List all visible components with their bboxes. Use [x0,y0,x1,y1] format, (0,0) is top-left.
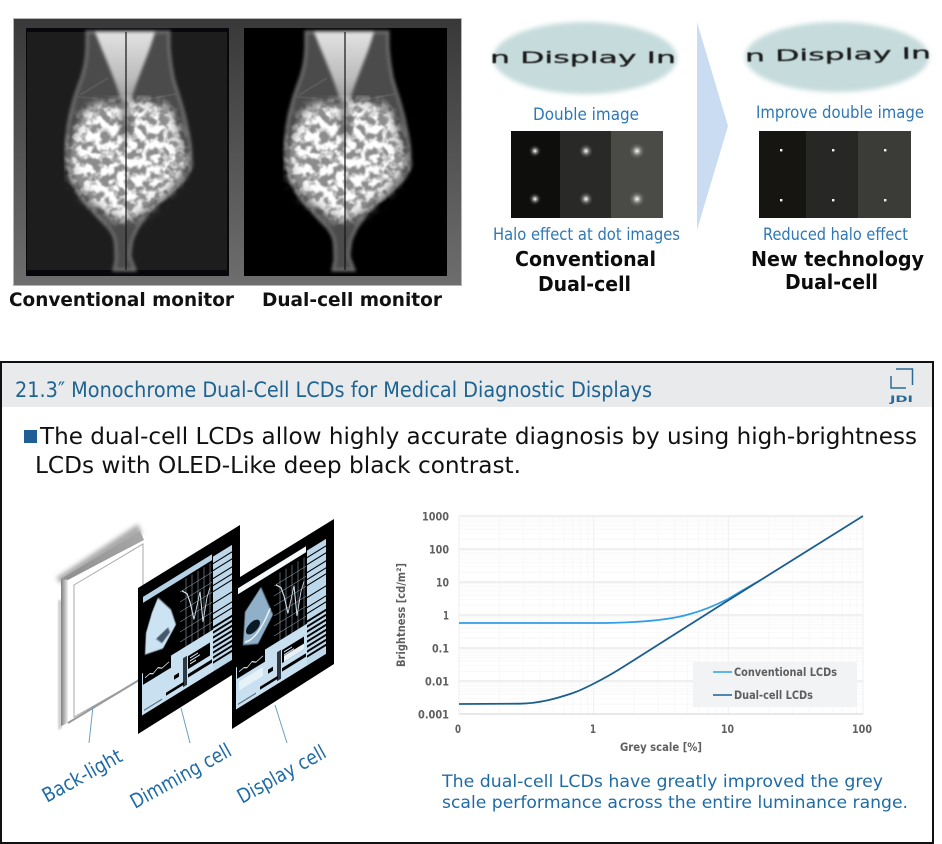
y axis tick labels: 1000 [422,510,449,524]
bullet square [24,430,37,443]
slide title: 21.3″ Monochrome Dual-Cell LCDs for Medical Diagnostic Displays [15,378,652,402]
reduced halo dot test image [759,131,911,218]
diagram: exploded dual-cell structure [38,519,334,813]
back-light panel [56,524,144,730]
line: conventional LCDs [459,580,760,623]
label: back-light: Back-light [38,744,127,807]
y axis title: Brightness [cd/m²] [394,563,408,667]
y axis tick labels [418,510,449,722]
x axis title: Grey scale [%] [620,740,702,754]
panel: new technology dual-cell [745,22,931,294]
icon: JDI logo [888,369,913,405]
caption: reduced halo effect: Reduced halo effect [763,225,908,244]
display cell [232,519,334,729]
caption: halo effect: Halo effect at dot images [493,225,680,244]
caption: grey scale performance: scale performance across the entire luminance range. [442,793,908,813]
label: dual-cell monitor: Dual-cell monitor [262,289,443,311]
legend: Conventional LCDs [734,665,837,679]
caption: grey scale performance [441,772,908,813]
caption: improve double image: Improve double image [756,103,924,123]
arrow: conventional to new technology [697,22,728,230]
icon: JDI logo: JDI [888,395,913,405]
label: display cell: Display cell [233,740,330,808]
legend: Dual-cell LCDs [734,688,813,702]
text block: key statement: The dual-cell LCDs allow highly accurate diagnosis by using high-brightness [39,424,917,450]
heading: conventional dual-cell: Dual-cell [538,272,631,296]
y axis tick labels: 10 [436,576,449,590]
line chart: brightness vs grey scale [394,510,872,754]
heading: conventional dual-cell [515,247,656,296]
dual-cell monitor image [244,28,447,276]
y axis tick labels: 0.001 [418,708,449,722]
label: conventional monitor: Conventional monitor [9,289,235,311]
improved lens photo: n Display In [745,43,931,66]
panel: conventional dual-cell [490,22,680,296]
panel: slide frame [1,362,933,843]
dimming cell [138,525,240,734]
x axis tick labels: 0 [455,722,461,736]
heading: new technology dual-cell [751,247,924,294]
y axis tick labels: 0.01 [425,674,449,688]
double image lens photo [490,22,677,94]
halo dot test image [511,131,663,218]
line: dual-cell LCDs [459,516,863,704]
text block: key statement: LCDs with OLED-Like deep black contrast. [35,453,521,479]
text block: key statement [24,424,917,479]
heading: new technology dual-cell: New technology [751,247,924,271]
caption: grey scale performance: The dual-cell LCDs have greatly improved the grey [441,772,883,792]
double image lens photo: n Display In [490,48,676,67]
x axis tick labels: 1 [590,722,596,736]
panel: mammogram monitor comparison [9,18,462,311]
y axis tick labels: 1 [443,608,449,622]
legend [693,662,857,707]
leader lines [89,705,287,743]
improved lens photo [745,22,931,92]
plot grid [459,516,863,714]
y axis tick labels: 100 [429,542,449,556]
x axis tick labels [455,722,872,736]
slide header band [2,363,932,407]
x axis tick labels: 100 [852,722,872,736]
caption: double image: Double image [533,105,639,125]
heading: new technology dual-cell: Dual-cell [785,270,878,294]
conventional monitor image [26,28,229,276]
y axis tick labels: 0.1 [432,642,449,656]
label: dimming cell: Dimming cell [126,738,235,813]
monitor frame [14,18,462,286]
heading: conventional dual-cell: Conventional [515,247,656,271]
x axis tick labels: 10 [721,722,734,736]
